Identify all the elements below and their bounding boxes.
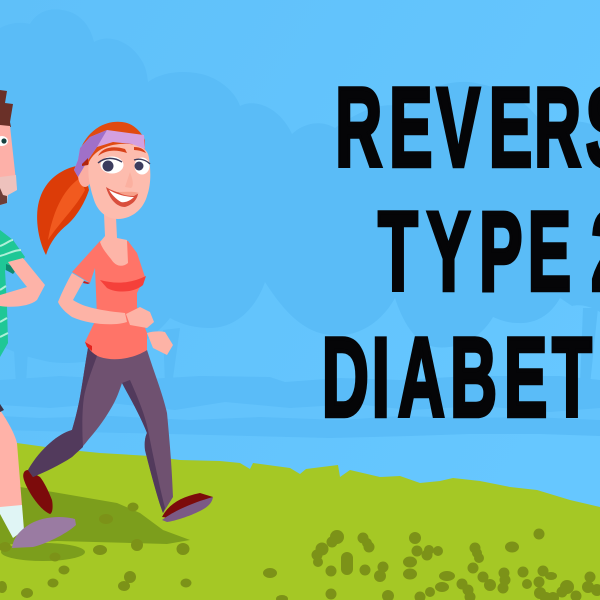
right iris — [134, 162, 144, 170]
neck and chest — [100, 214, 128, 266]
left eye — [100, 156, 124, 174]
face — [88, 144, 150, 219]
left iris — [102, 160, 114, 172]
background tree silhouettes — [0, 9, 600, 438]
hair — [80, 122, 145, 170]
man sleeve shadow — [6, 264, 18, 274]
man iris — [1, 138, 7, 144]
shirt band — [100, 276, 146, 292]
man face — [0, 125, 17, 195]
man stubble — [0, 175, 17, 205]
ponytail — [37, 166, 89, 255]
shirt hem fold — [85, 342, 92, 351]
hair under band — [82, 158, 88, 166]
right eyebrow — [134, 147, 146, 153]
man shoe — [12, 517, 76, 548]
man shorts hem — [0, 404, 4, 412]
woman runner — [23, 122, 213, 522]
man sock — [0, 505, 24, 538]
ponytail highlight — [48, 178, 85, 240]
upper lip — [118, 192, 139, 196]
headband knot shade — [74, 130, 107, 177]
teeth — [109, 190, 134, 202]
left eyebrow — [98, 147, 127, 156]
woman front arm — [58, 273, 127, 324]
man beard — [0, 188, 7, 205]
man shirt stripes — [0, 240, 21, 337]
headband — [74, 130, 145, 177]
shirt — [72, 241, 147, 359]
woman front hand — [126, 307, 154, 328]
nose shade — [125, 172, 133, 188]
legging shadow right — [122, 380, 165, 513]
front shoe — [162, 493, 213, 518]
sleeve fold — [83, 281, 90, 284]
ground shadow — [0, 487, 190, 545]
leggings — [28, 348, 173, 513]
grass spots — [0, 502, 600, 600]
front shoe sole — [162, 497, 213, 522]
back shoe — [23, 470, 53, 514]
ear — [78, 163, 92, 187]
right eye — [134, 158, 150, 174]
title — [322, 66, 600, 440]
man arm — [0, 258, 45, 307]
mouth — [106, 187, 138, 207]
grass hill — [0, 440, 600, 600]
man runner (cropped at left edge) — [0, 90, 76, 548]
foot shadow — [1, 543, 85, 561]
man eye — [0, 136, 8, 146]
man torso shirt — [0, 230, 25, 357]
eyelashes — [98, 158, 150, 164]
woman back hand — [147, 331, 173, 355]
man leg — [0, 410, 22, 508]
man hair — [0, 90, 13, 127]
legging shadow left — [28, 348, 98, 477]
